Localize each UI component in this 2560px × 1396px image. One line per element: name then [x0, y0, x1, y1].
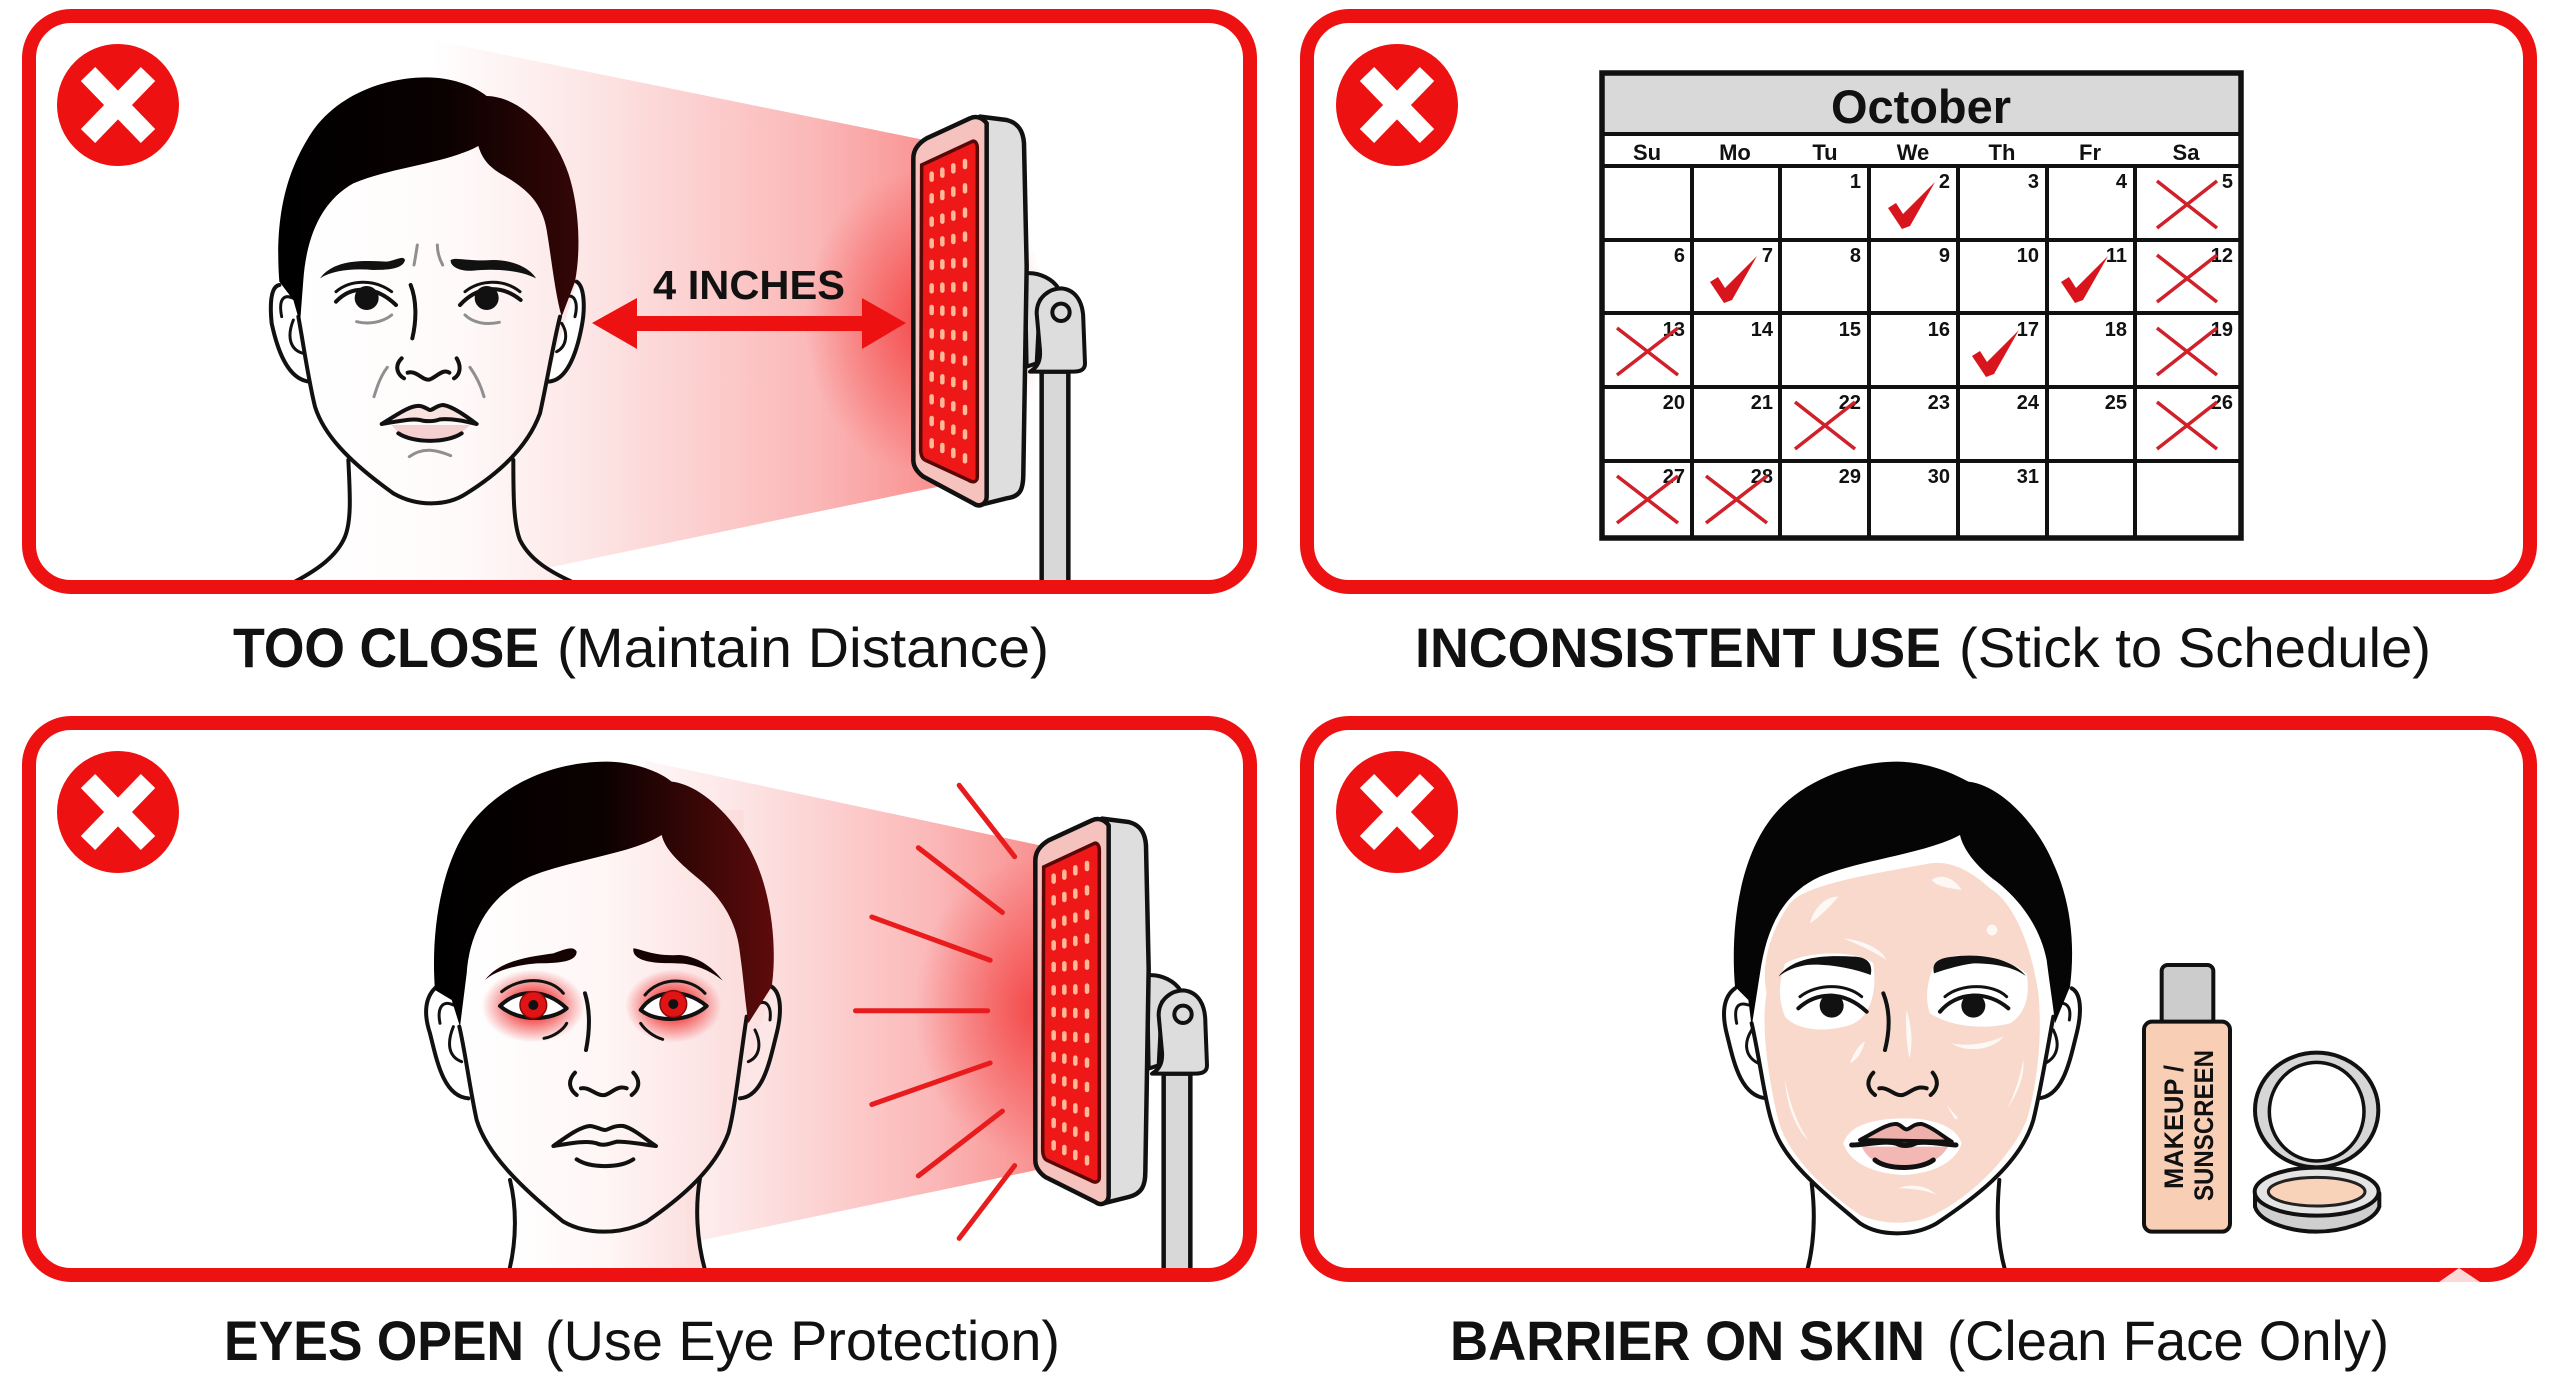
day numbers: 9: [1939, 245, 1950, 267]
month header: October: [1831, 80, 2011, 133]
day numbers: 31: [2017, 466, 2039, 488]
light beam and glow: [433, 40, 1049, 580]
day numbers: 21: [1751, 392, 1773, 414]
panel: inconsistent use: [1307, 16, 2530, 679]
panel frame: [29, 723, 1250, 1275]
caption: BARRIER ON SKIN: [1450, 1309, 1925, 1372]
nose: [397, 285, 460, 380]
day numbers: 1: [1850, 171, 1861, 193]
ears: [271, 282, 584, 382]
LED array: [1043, 843, 1099, 1182]
day numbers: 10: [2017, 245, 2039, 267]
panel body: [1035, 819, 1149, 1204]
weekday labels: Mo: [1719, 140, 1751, 165]
cream layer on skin: [1764, 863, 2040, 1223]
eyebrows: [485, 948, 723, 981]
lips: [1852, 1124, 1956, 1167]
caption: [1450, 1309, 2389, 1372]
day numbers: 4: [2116, 171, 2128, 193]
bottle: [2144, 965, 2230, 1232]
bottle label: MAKEUP /: [2159, 1065, 2189, 1189]
stand: [1147, 975, 1207, 1274]
day numbers: 13: [1663, 319, 1685, 341]
face outline: [459, 810, 747, 1232]
caption: (Clean Face Only): [1947, 1309, 2389, 1372]
weekday labels: Fr: [2079, 140, 2101, 165]
caption: [224, 1309, 1060, 1372]
mouth: [553, 1126, 656, 1166]
day numbers: 20: [1663, 392, 1685, 414]
day numbers: 18: [2105, 319, 2127, 341]
caption: TOO CLOSE: [233, 616, 539, 679]
light beam, glow and rays: [604, 761, 1159, 1261]
compact base: [2255, 1168, 2379, 1232]
day numbers: 14: [1751, 319, 1774, 341]
day numbers: 19: [2211, 319, 2233, 341]
LED array: [921, 141, 977, 482]
day numbers: 30: [1928, 466, 1950, 488]
icon: red X badge: [57, 751, 179, 873]
month header: [1602, 73, 2241, 134]
ears: [426, 987, 780, 1098]
light panel device: [1035, 819, 1207, 1274]
bottle label: SUNSCREEN: [2189, 1050, 2219, 1201]
weekday labels: Th: [1989, 140, 2015, 165]
day numbers: 29: [1839, 466, 1861, 488]
light panel device: [913, 117, 1085, 585]
eyebrows: [1778, 956, 2026, 977]
eye irritation glow: [482, 969, 722, 1043]
weekday labels: Sa: [2173, 140, 2200, 165]
face illustration: [1724, 762, 2080, 1270]
ears: [1724, 988, 2080, 1098]
day numbers: 25: [2105, 392, 2127, 414]
day numbers: 5: [2222, 171, 2233, 193]
neck: [295, 443, 572, 582]
day numbers: 8: [1850, 245, 1861, 267]
uncovered white patches: [1780, 953, 2028, 1175]
nose: [1868, 993, 1937, 1095]
weekday labels: [1633, 140, 2200, 165]
distance arrow: [592, 298, 906, 349]
day numbers: 7: [1762, 245, 1773, 267]
icon: red X badge: [1336, 44, 1458, 166]
day numbers: 24: [2017, 392, 2040, 414]
eyes: [1798, 987, 2008, 1018]
day numbers: 2: [1939, 171, 1950, 193]
hair: [434, 762, 774, 1027]
wrinkles: [357, 245, 499, 457]
face outline: [298, 127, 560, 503]
weekday labels: Tu: [1812, 140, 1838, 165]
caption: (Stick to Schedule): [1959, 616, 2431, 679]
red eyes: [500, 981, 707, 1039]
compact mirror: [2255, 1053, 2378, 1167]
day numbers: 23: [1928, 392, 1950, 414]
icon: red X badge: [57, 44, 179, 166]
missed-day crosses: [1617, 181, 2217, 523]
panel: barrier on skin: [1307, 723, 2530, 1372]
day numbers: 22: [1839, 392, 1861, 414]
icon: red X badge: [1336, 751, 1458, 873]
neck: [1807, 1180, 2005, 1270]
caption: INCONSISTENT USE: [1415, 616, 1941, 679]
panel: too close: [29, 16, 1250, 679]
eyes: [336, 282, 521, 310]
panel: eyes open: [29, 723, 1250, 1372]
day numbers: 3: [2028, 171, 2039, 193]
day numbers: 17: [2017, 319, 2039, 341]
mouth: [382, 405, 477, 441]
skin highlights: [1785, 877, 2024, 1195]
day numbers: 16: [1928, 319, 1950, 341]
face outline: [1752, 810, 2053, 1233]
face illustration: [426, 762, 780, 1270]
check marks: [1710, 182, 2108, 377]
calendar grid: [1602, 134, 2241, 538]
panel frame: [1307, 723, 2530, 1275]
caption: (Maintain Distance): [557, 616, 1049, 679]
caption: EYES OPEN: [224, 1309, 524, 1372]
nose: [570, 993, 638, 1095]
eyebrows: [320, 258, 536, 278]
neck: [509, 1160, 705, 1270]
stand: [1025, 273, 1085, 585]
day numbers: [1663, 171, 2233, 488]
day numbers: 15: [1839, 319, 1861, 341]
day numbers: 27: [1663, 466, 1685, 488]
distance label: 4 INCHES: [653, 262, 845, 308]
weekday labels: Su: [1633, 140, 1661, 165]
caption: (Use Eye Protection): [545, 1309, 1060, 1372]
hair: [278, 77, 578, 323]
panel frame: [29, 16, 1250, 587]
caption: [1415, 616, 2431, 679]
day numbers: 28: [1751, 466, 1773, 488]
day numbers: 6: [1674, 245, 1685, 267]
panel body: [913, 117, 1027, 505]
bottle label: [2159, 1050, 2219, 1201]
day numbers: 26: [2211, 392, 2233, 414]
calendar: [1602, 73, 2241, 538]
hair: [1734, 762, 2072, 1027]
day numbers: 12: [2211, 245, 2233, 267]
caption: [233, 616, 1049, 679]
weekday labels: We: [1897, 140, 1929, 165]
makeup bottle and compact: [2144, 965, 2379, 1232]
face illustration: [271, 77, 584, 582]
panel frame: [1307, 16, 2530, 587]
day numbers: 11: [2106, 245, 2127, 267]
